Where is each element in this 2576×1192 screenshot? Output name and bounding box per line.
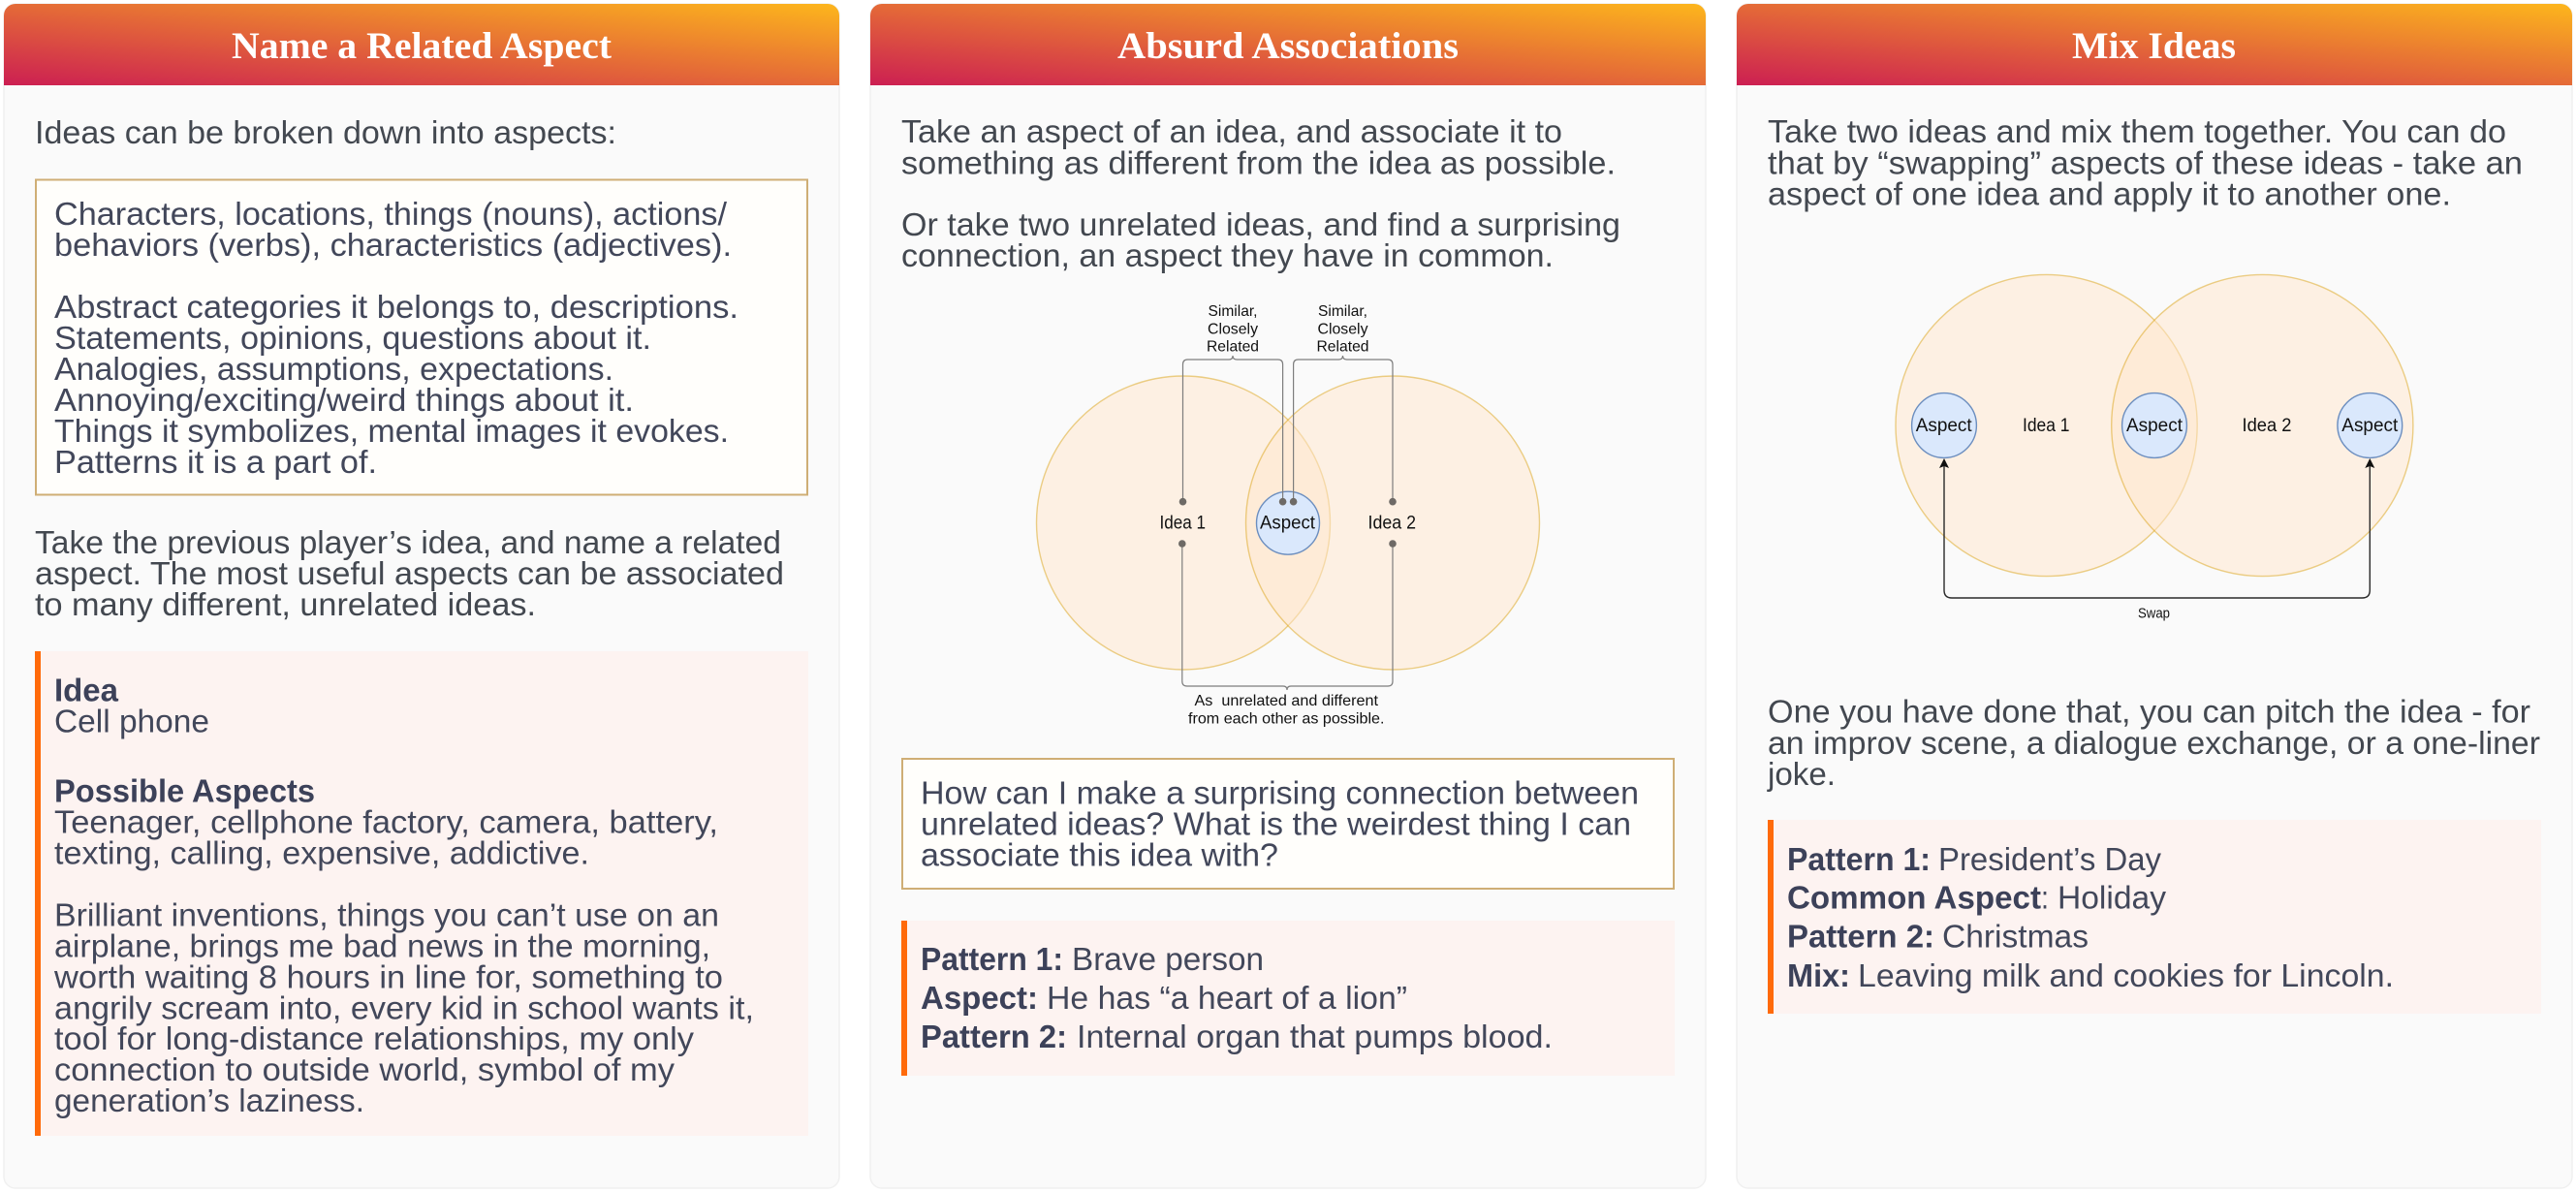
- callout: Lincoln example: [1768, 820, 2541, 1014]
- paragraph: pitch the idea: [1767, 695, 2540, 793]
- label: similar, closely related (left): Similar,: [1208, 303, 1258, 320]
- callout: brave person example: Internal organ that pumps blood.: [1077, 1019, 1553, 1055]
- callout: brave person example: Aspect:: [921, 981, 1038, 1017]
- circle: left Aspect: [1912, 393, 1976, 457]
- callout: Lincoln example: Mix:: [1787, 958, 1850, 994]
- label: left Aspect: Aspect: [1916, 416, 1972, 436]
- header: Absurd Associations: Absurd Associations: [1117, 25, 1459, 67]
- intro text: aspect of one idea and apply it to another one.: [1768, 176, 2451, 213]
- paragraph: name a related aspect: [35, 525, 784, 623]
- label: Idea 1: Idea 1: [1159, 514, 1206, 534]
- callout: cell phone example: tool for long-distance relationships, my only: [54, 1021, 694, 1057]
- callout: cell phone example: worth waiting 8 hours in line for, something to: [53, 959, 723, 996]
- paragraph: pitch the idea: an improv scene, a dialogue exchange, or a one-liner: [1768, 726, 2540, 762]
- callout: cell phone example: Possible Aspects: [54, 773, 315, 810]
- callout: Lincoln example: President’s Day: [1938, 842, 2161, 878]
- bracket: Aspect to Idea 2, similar: [1290, 356, 1397, 506]
- circle: Idea 1: [1896, 274, 2197, 577]
- label: as unrelated as possible: [1188, 693, 1384, 728]
- diagram: venn with swapped aspects: [1896, 274, 2413, 622]
- box: aspect types: behaviors (verbs), characteristics (adjectives).: [54, 228, 732, 264]
- label: similar, closely related (left): Closely: [1208, 321, 1258, 337]
- callout: cell phone example: generation’s laziness.: [54, 1083, 364, 1119]
- box: prompt questions: associate this idea with?: [921, 837, 1278, 874]
- label: Idea 2: Idea 2: [2243, 416, 2291, 436]
- paragraph: pitch the idea: joke.: [1767, 757, 1836, 793]
- bracket: Idea 1 to Aspect, similar: [1179, 356, 1286, 506]
- callout: Lincoln example: :: [2041, 881, 2049, 917]
- callout: Lincoln example: Christmas: [1942, 919, 2089, 956]
- box: aspect types: [36, 180, 807, 494]
- callout: Lincoln example: Leaving milk and cookies for Lincoln.: [1858, 958, 2394, 994]
- intro text: that by “swapping” aspects of these ideas - take an: [1768, 145, 2523, 182]
- label: Aspect: Aspect: [1260, 514, 1316, 534]
- callout: Lincoln example: Pattern 2:: [1787, 919, 1934, 956]
- label: similar, closely related (right): Similar,: [1318, 303, 1367, 320]
- circle: right Aspect: [2338, 393, 2403, 457]
- panel: Absurd Associations: [870, 4, 1706, 1188]
- label: as unrelated as possible: from each other as possible.: [1188, 711, 1384, 728]
- label: similar, closely related (left): Related: [1207, 339, 1259, 356]
- callout: brave person example: Brave person: [1072, 942, 1264, 978]
- box: aspect types: Patterns it is a part of.: [54, 445, 377, 481]
- header: Mix Ideas: [1737, 4, 2572, 85]
- paragraph: name a related aspect: Take the previous player’s idea, and name a related: [35, 525, 781, 561]
- callout: cell phone example: airplane, brings me bad news in the morning,: [54, 928, 710, 965]
- header: Name a Related Aspect: [4, 4, 839, 85]
- callout: brave person example: Pattern 2:: [921, 1019, 1067, 1055]
- header: Absurd Associations: [870, 4, 1706, 85]
- callout: cell phone example: Teenager, cellphone factory, camera, battery,: [54, 804, 718, 841]
- panel: Name a Related Aspect: [4, 4, 839, 1188]
- circle: Idea 2: [1246, 376, 1539, 670]
- label: similar, closely related (right): [1316, 303, 1368, 356]
- circle: Idea 1: [1037, 376, 1330, 670]
- intro text: Take an aspect of an idea, and associate it to: [901, 114, 1562, 150]
- label: similar, closely related (right): Related: [1316, 339, 1368, 356]
- callout: cell phone example: connection to outside world, symbol of my: [54, 1052, 675, 1088]
- callout: Lincoln example: Pattern 1:: [1787, 842, 1931, 878]
- intro text: Or take two unrelated ideas, and find a surprising: [901, 207, 1620, 243]
- arrow: swap: [1939, 458, 2374, 598]
- box: prompt questions: unrelated ideas? What is the weirdest thing I can: [921, 807, 1631, 843]
- circle: Aspect: [1256, 491, 1320, 554]
- callout: Lincoln example: Holiday: [2058, 881, 2166, 917]
- header: Mix Ideas: Mix Ideas: [2072, 25, 2236, 67]
- intro text: [1768, 114, 2523, 213]
- callout: cell phone example: texting, calling, expensive, addictive.: [54, 835, 589, 872]
- panel background: [4, 4, 839, 1188]
- intro text: connection, an aspect they have in common.: [901, 238, 1554, 274]
- callout: brave person example: Pattern 1:: [921, 942, 1063, 978]
- callout: cell phone example: Brilliant inventions, things you can’t use on an: [54, 897, 719, 934]
- paragraph: name a related aspect: aspect. The most useful aspects can be associated: [35, 556, 784, 592]
- panel background: [1737, 4, 2572, 1188]
- box: aspect types: Characters, locations, things (nouns), actions/: [54, 197, 728, 233]
- label: similar, closely related (right): Closely: [1318, 321, 1368, 337]
- box: aspect types: Analogies, assumptions, expectations.: [54, 352, 613, 388]
- header: Name a Related Aspect: Name a Related Aspect: [232, 25, 612, 67]
- bracket: Idea 1 to Idea 2, unrelated: [1178, 540, 1397, 690]
- callout: brave person example: [901, 921, 1675, 1076]
- callout: Lincoln example: Common Aspect: [1787, 881, 2041, 917]
- diagram: venn with shared aspect: [1037, 303, 1539, 728]
- label: Swap: Swap: [2138, 606, 2170, 622]
- box: aspect types: Annoying/exciting/weird things about it.: [54, 383, 634, 419]
- callout: cell phone example: angrily scream into, every kid in school wants it,: [54, 990, 754, 1027]
- intro text: [901, 114, 1620, 274]
- label: as unrelated as possible: As unrelated and different: [1194, 693, 1379, 709]
- intro text: Ideas can be broken down into aspects:: [35, 115, 616, 151]
- callout: cell phone example: Idea: [54, 673, 118, 709]
- label: shared Aspect: Aspect: [2126, 416, 2183, 436]
- callout: brave person example: He has “a heart of a lion”: [1047, 981, 1407, 1017]
- intro text: something as different from the idea as possible.: [901, 145, 1616, 182]
- box: aspect types: Things it symbolizes, mental images it evokes.: [54, 414, 729, 450]
- paragraph: pitch the idea: One you have done that, you can pitch the idea - for: [1768, 695, 2530, 731]
- circle: shared Aspect: [2122, 393, 2186, 457]
- circle: Idea 2: [2112, 274, 2413, 577]
- intro text: Take two ideas and mix them together. You can do: [1768, 114, 2506, 150]
- box: prompt questions: [902, 759, 1674, 889]
- box: aspect types: Abstract categories it belongs to, descriptions.: [54, 290, 738, 326]
- callout: cell phone example: [35, 651, 808, 1136]
- box: prompt questions: How can I make a surprising connection between: [921, 775, 1639, 812]
- callout: cell phone example: Cell phone: [54, 704, 209, 740]
- panel background: [870, 4, 1706, 1188]
- box: aspect types: Statements, opinions, questions about it.: [54, 321, 651, 357]
- label: Idea 2: Idea 2: [1368, 514, 1416, 534]
- label: right Aspect: Aspect: [2341, 416, 2399, 436]
- label: similar, closely related (left): [1207, 303, 1259, 356]
- label: Idea 1: Idea 1: [2023, 416, 2070, 436]
- paragraph: name a related aspect: to many different, unrelated ideas.: [35, 587, 536, 623]
- panel: Mix Ideas: [1737, 4, 2572, 1188]
